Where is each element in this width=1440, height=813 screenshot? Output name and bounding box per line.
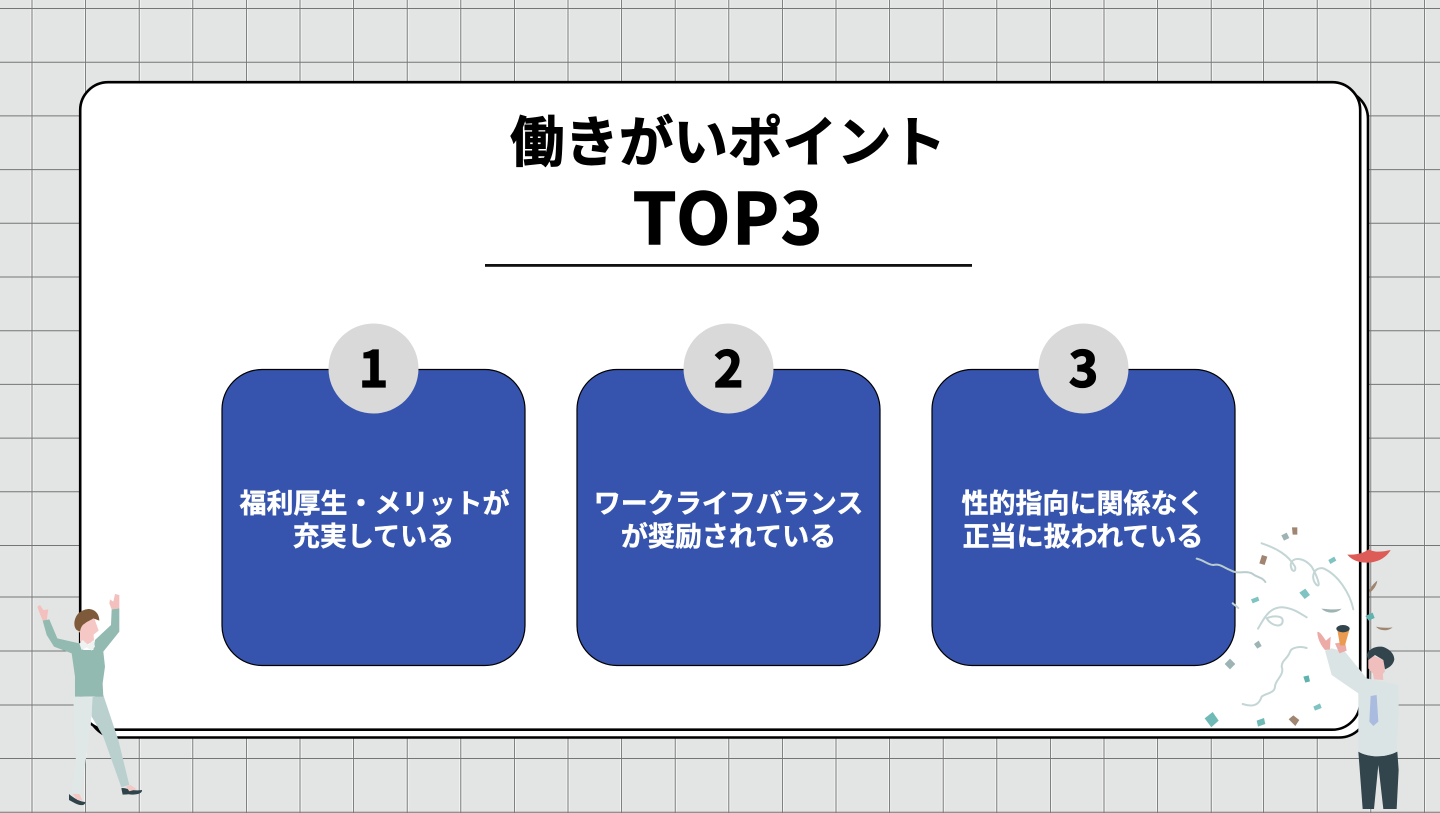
illustration: man with cup [1317,625,1399,809]
point 1 text: 充実している [293,515,454,554]
panel: back shadow card [88,90,1368,738]
title underline [485,264,972,267]
number 2: 2 [714,330,743,402]
illustration: woman cheering [37,594,142,805]
number badge 2 [684,324,774,414]
number badge 3 [1038,324,1128,414]
card 3 background [932,370,1235,666]
number badge 1 [328,324,418,414]
title: TOP3: TOP3 [633,164,824,265]
illustration: confetti [1197,527,1393,727]
point 3 text: 正当に扱われている [963,515,1203,554]
number 1: 1 [359,330,388,402]
point 2 text: ワークライフバランス [594,482,863,521]
point 3 text: 性的指向に関係なく [962,482,1204,521]
card 1 background [222,370,525,666]
point 1 text: 福利厚生・メリットが [240,482,510,521]
panel: main white card [80,82,1360,730]
panel: point 1 [222,324,525,666]
panel: point 2 [577,324,880,666]
card 2 background [577,370,880,666]
panel: point 3 [932,324,1235,666]
number 3: 3 [1069,330,1098,402]
point 2 text: が奨励されている [621,515,836,554]
title: 働きがいポイント: 働きがいポイント [510,98,946,178]
